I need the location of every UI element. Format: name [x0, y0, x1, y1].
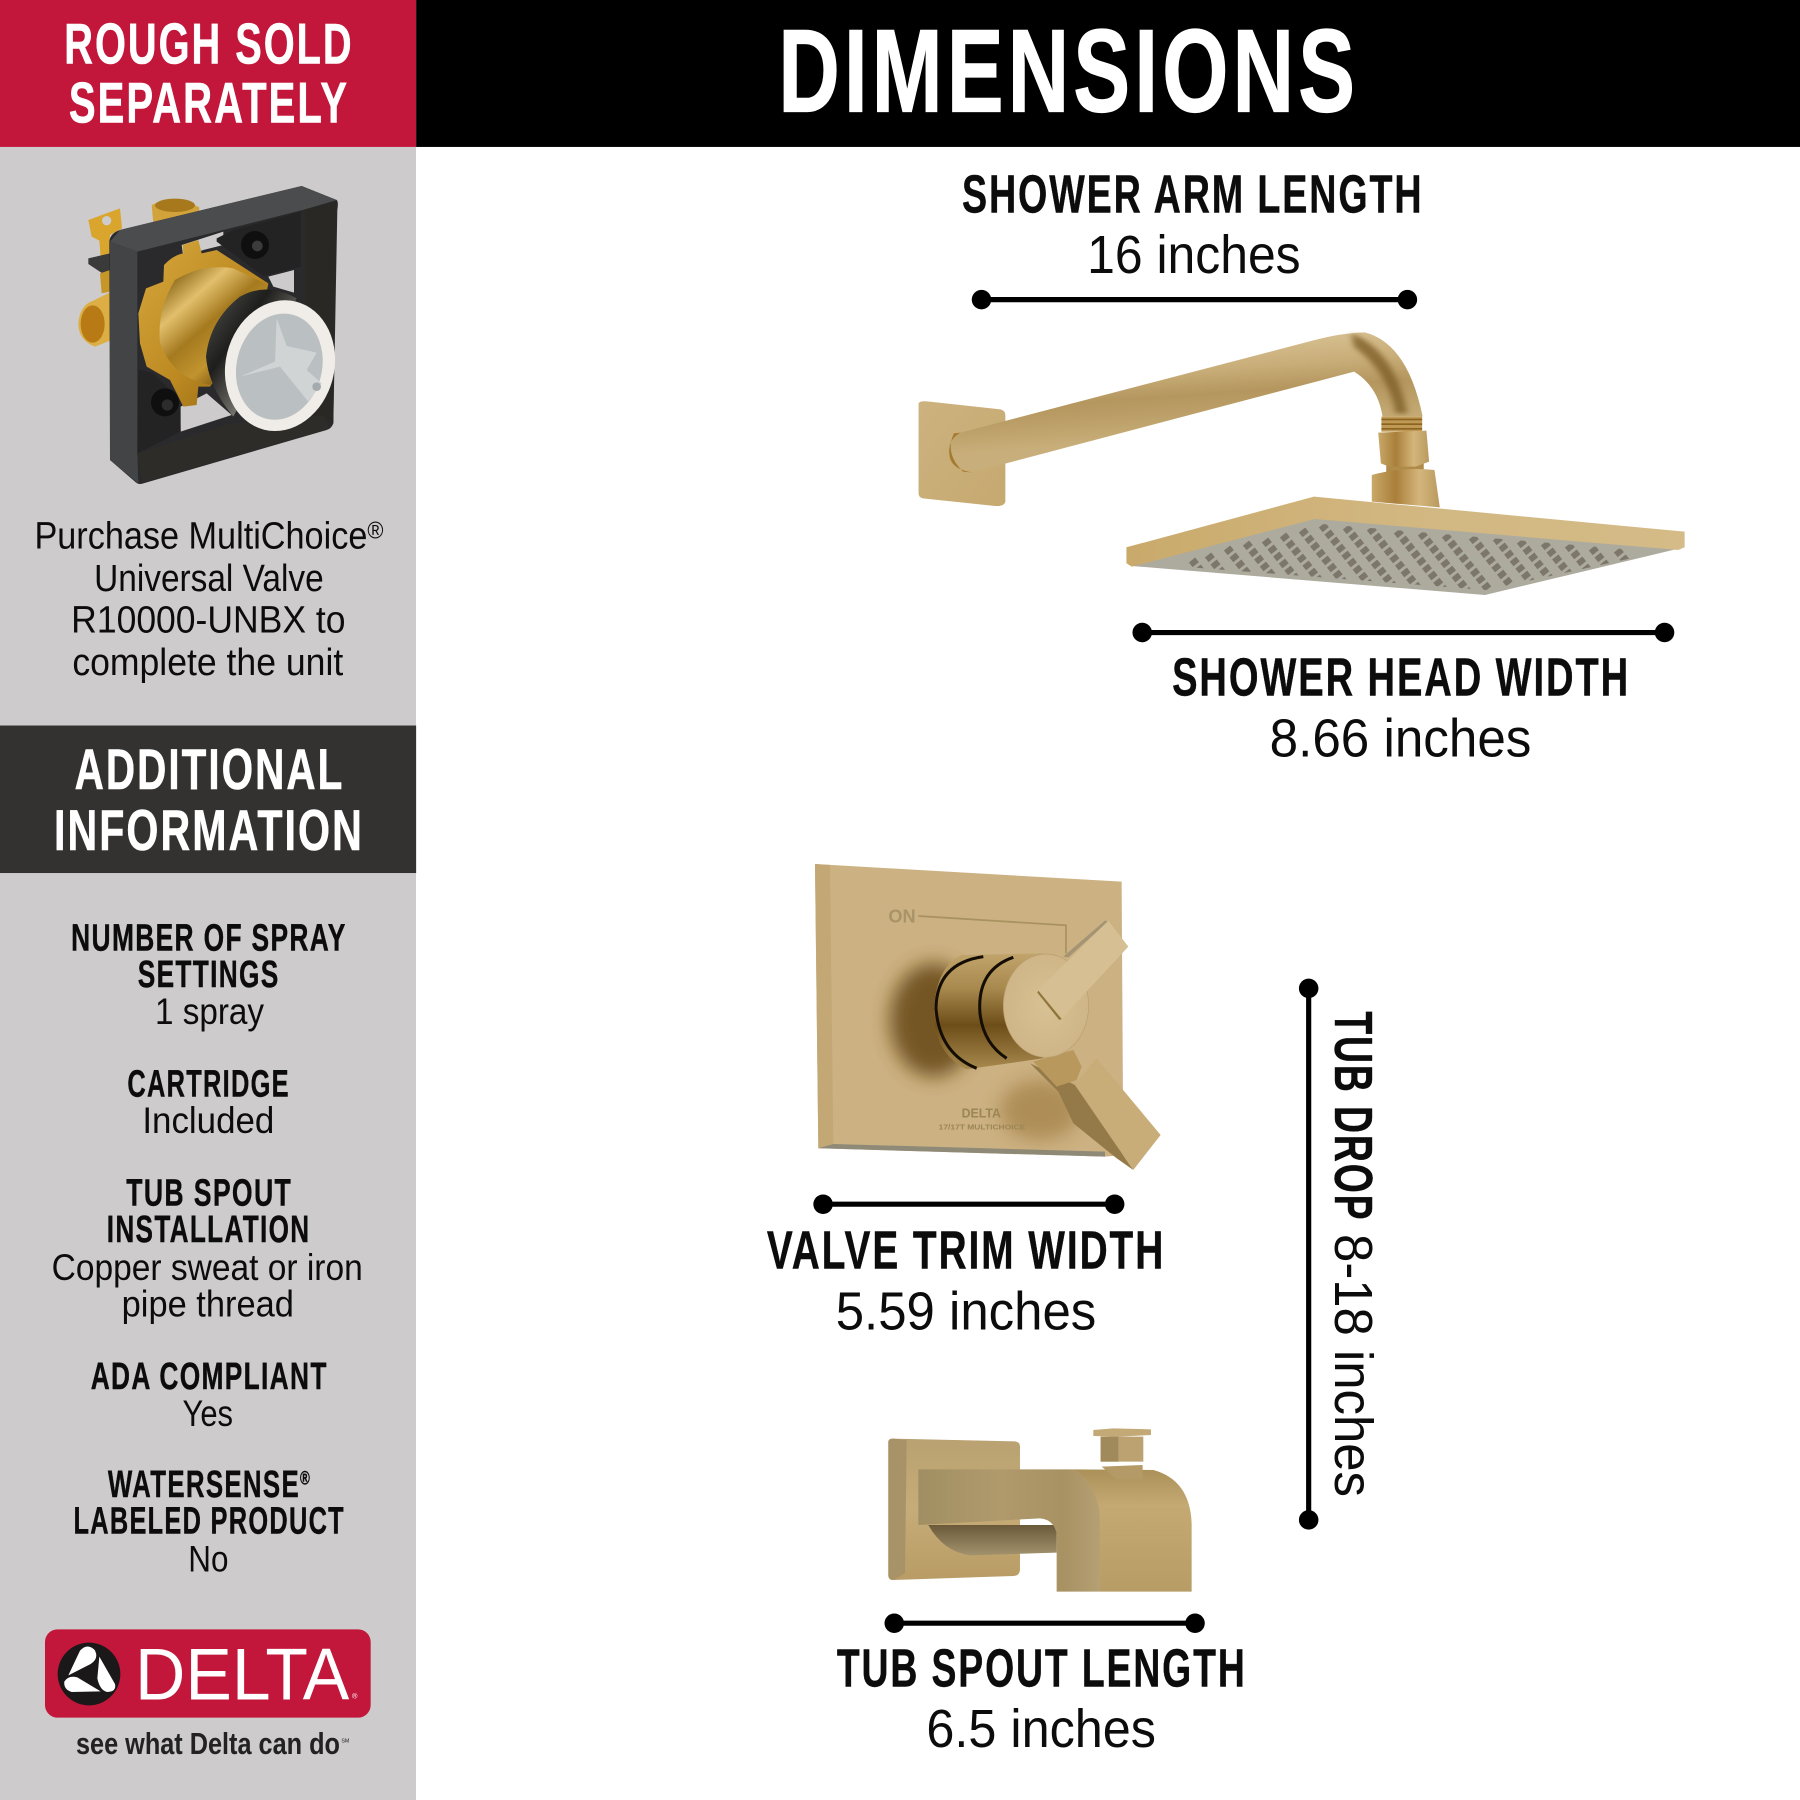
dimension: valve trim width: 5.59 inches	[836, 1281, 1096, 1341]
info list	[52, 918, 363, 1580]
dimension: shower arm length: 16 inches	[1087, 225, 1301, 285]
dimension: shower head width	[1132, 623, 1674, 769]
tub spout installation: Copper sweat or iron	[52, 1247, 363, 1288]
watersense: No	[188, 1539, 228, 1580]
icon: delta triangle mark	[58, 1643, 120, 1705]
text: purchase note: ®	[367, 517, 384, 544]
text: purchase note	[34, 516, 384, 684]
head rim	[1126, 497, 1685, 567]
spray settings: NUMBER OF SPRAY	[71, 918, 347, 960]
dimension: tub drop: 8-18 inches	[1323, 1234, 1383, 1497]
valve collar	[206, 290, 297, 417]
spout wall plate	[888, 1439, 1020, 1580]
valve brass body	[138, 240, 268, 407]
cartridge	[127, 1063, 290, 1141]
text: purchase note: Purchase MultiChoice	[34, 516, 403, 558]
panel: grey sidebar	[0, 147, 416, 1800]
dimension: shower head width: 8.66 inches	[1270, 709, 1531, 769]
trim plate: ON	[888, 906, 916, 927]
head underside with nozzles	[1133, 519, 1674, 595]
ada compliant: Yes	[183, 1393, 233, 1434]
valve screws	[151, 231, 269, 416]
logo: delta: see what Delta can do	[76, 1727, 340, 1761]
wall flange	[919, 401, 1005, 506]
logo: delta: ®	[352, 1692, 358, 1701]
watersense	[73, 1464, 345, 1580]
dimension: shower arm length: SHOWER ARM LENGTH	[962, 164, 1423, 224]
ada compliant: ADA COMPLIANT	[91, 1356, 328, 1398]
watersense: ®	[300, 1467, 311, 1489]
trim plate: DELTA	[962, 1105, 1001, 1120]
cartridge: CARTRIDGE	[127, 1063, 290, 1105]
spray settings: 1 spray	[155, 991, 265, 1032]
spout body	[918, 1469, 1100, 1592]
logo: delta	[45, 1629, 371, 1761]
cartridge: Included	[142, 1100, 274, 1141]
image: shower arm and head	[918, 332, 1685, 595]
valve brass fittings behind frame	[78, 199, 199, 347]
spray settings: SETTINGS	[138, 954, 280, 996]
spout underside	[928, 1525, 1057, 1555]
banner: rough sold separately: SEPARATELY	[69, 71, 349, 135]
image: valve trim	[815, 864, 1161, 1170]
arm	[949, 332, 1423, 473]
logo: delta: SM	[341, 1739, 349, 1745]
image: rough-in valve	[78, 186, 349, 484]
heading: additional information: ADDITIONAL	[75, 738, 344, 802]
tub spout installation	[52, 1172, 363, 1325]
dimension: valve trim width: VALVE TRIM WIDTH	[767, 1220, 1165, 1280]
tub spout installation: pipe thread	[122, 1284, 294, 1325]
banner: rough sold separately	[0, 0, 416, 147]
upper handle	[1037, 921, 1128, 1020]
knob cylinder	[934, 953, 1089, 1069]
title banner: dimensions	[416, 0, 1800, 147]
text: purchase note: Universal Valve	[94, 558, 324, 600]
heading: additional information	[0, 726, 416, 873]
trim plate	[815, 864, 1123, 1157]
swivel neck	[1372, 417, 1440, 507]
title banner: dimensions: DIMENSIONS	[778, 5, 1359, 137]
valve mount plates	[137, 212, 301, 453]
dimension: tub drop: TUB DROP	[1323, 1011, 1383, 1221]
text: purchase note: complete the unit	[72, 642, 344, 684]
dimension: tub spout length: 6.5 inches	[926, 1699, 1156, 1759]
dimension: valve trim width	[767, 1194, 1165, 1341]
valve ring and cap	[211, 288, 349, 443]
tub spout installation: TUB SPOUT	[126, 1172, 292, 1214]
dimension: shower arm length	[962, 164, 1423, 309]
trim plate: 17/17T MULTICHOICE	[939, 1122, 1025, 1131]
banner: rough sold separately: ROUGH SOLD	[64, 13, 354, 77]
tub spout installation: INSTALLATION	[107, 1209, 311, 1251]
heading: additional information: INFORMATION	[54, 799, 364, 863]
spray settings	[71, 918, 347, 1032]
dimension: tub spout length	[837, 1613, 1247, 1759]
valve frame	[109, 186, 338, 484]
dimension: tub spout length: TUB SPOUT LENGTH	[837, 1638, 1247, 1698]
watersense: WATERSENSE	[108, 1464, 389, 1506]
ada compliant	[91, 1356, 328, 1434]
logo: delta: DELTA	[135, 1632, 349, 1715]
spout front	[1073, 1469, 1192, 1592]
watersense: LABELED PRODUCT	[73, 1501, 345, 1543]
lower handle	[1030, 1050, 1161, 1170]
diverter knob	[1093, 1428, 1151, 1479]
text: purchase note: R10000-UNBX to	[71, 600, 346, 642]
image: tub spout	[888, 1428, 1192, 1592]
dimension: tub drop	[1299, 979, 1383, 1530]
